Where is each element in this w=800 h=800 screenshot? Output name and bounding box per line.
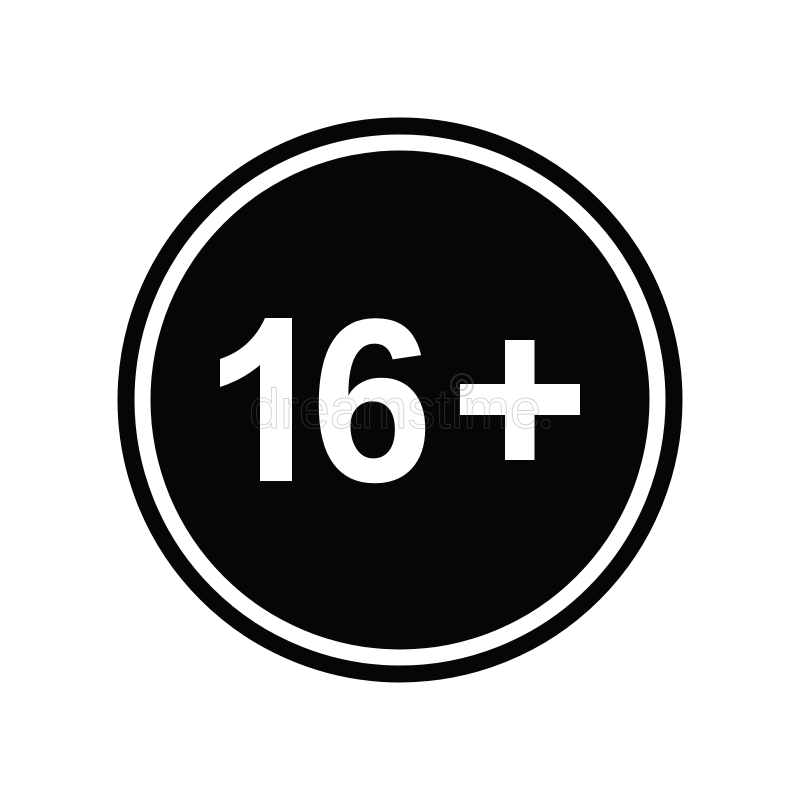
outer ring xyxy=(126,126,674,674)
label: 16 xyxy=(200,270,433,531)
watermark: dreamstime xyxy=(249,377,541,440)
label: 16: 6 xyxy=(311,271,433,531)
inner disc xyxy=(150,150,650,650)
label: 16: 1 xyxy=(205,270,332,530)
icon: plus sign xyxy=(460,340,580,460)
